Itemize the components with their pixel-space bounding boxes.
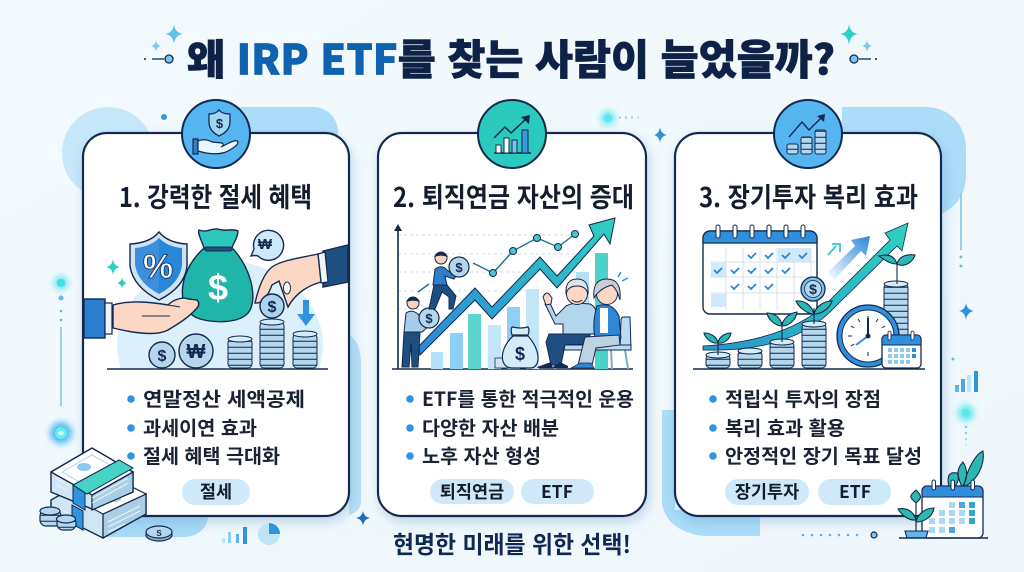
icon: coins with arrow <box>774 100 842 168</box>
illustration: stacks of cash and coins <box>40 448 146 538</box>
icon: hand holding shield <box>182 100 250 168</box>
arrow: growth curve <box>703 223 908 350</box>
icon: pale money bag: $ <box>515 344 525 364</box>
tag: 장기투자: 장기투자 <box>735 479 799 504</box>
illustration: long-term compounding <box>693 223 925 369</box>
mini bar chart and pie <box>222 523 280 545</box>
bullet list 2: 다양한 자산 배분 <box>422 412 559 441</box>
bullet list 3: 안정적인 장기 목표 달성 <box>725 440 922 469</box>
bullet list 1: 연말정산 세액공제 <box>143 383 305 412</box>
title decoration right <box>840 24 877 63</box>
heading 1: 1. 강력한 절세 혜택 <box>119 176 312 215</box>
tag: 절세 <box>182 479 250 505</box>
coins <box>149 334 213 368</box>
coin stacks <box>228 319 317 368</box>
icon: lying coin: S <box>156 529 162 538</box>
icon: shield with percent: % <box>143 248 173 286</box>
coins: ₩ <box>187 341 206 363</box>
senior man <box>537 279 597 368</box>
panel: card 1 <box>83 100 349 516</box>
line with dots <box>418 230 578 292</box>
heading 2: 2. 퇴직연금 자산의 증대 <box>393 176 634 215</box>
arrow: small teal <box>828 244 840 255</box>
icon: won speech bubble: ₩ <box>258 236 273 253</box>
bullet list 3: 적립식 투자의 장점 <box>725 383 881 412</box>
icon: sparkles <box>106 259 127 289</box>
icon: lying coin <box>146 526 172 541</box>
panel: card 2 <box>378 100 646 516</box>
person with coin, upper <box>429 252 469 309</box>
person with coin, lower: $ <box>425 311 433 326</box>
decorative blobs <box>62 107 966 537</box>
coin stacks <box>706 281 908 368</box>
person with coin, upper: $ <box>455 260 463 275</box>
icon: held coin: $ <box>268 299 277 316</box>
illustration: calendar with plants <box>898 451 988 538</box>
bullet list 2: 노후 자산 형성 <box>422 440 541 469</box>
arrow: fading blue <box>828 236 870 280</box>
senior couple on chair <box>537 272 631 369</box>
title decoration left <box>144 24 183 63</box>
bullet list 2: ETF를 통한 적극적인 운용 <box>422 383 634 412</box>
icon: won speech bubble <box>251 230 284 260</box>
title: 왜 IRP ETF를 찾는 사람이 늘었을까? <box>187 26 835 86</box>
icon: hand holding shield: $ <box>216 116 224 131</box>
bullet list 3: 복리 효과 활용 <box>725 412 845 441</box>
icon: receiving hand <box>255 245 348 307</box>
bottom tagline: 현명한 미래를 위한 선택! <box>393 525 631 560</box>
icon: clock <box>837 305 899 367</box>
icon: coin on sprout: $ <box>809 281 817 297</box>
tag: 퇴직연금: 퇴직연금 <box>440 479 504 504</box>
icon: money bag <box>182 229 253 322</box>
bottom dotted line <box>802 532 877 538</box>
bullet list 1: 절세 혜택 극대화 <box>143 440 280 469</box>
arrow: down <box>297 300 315 326</box>
bar chart <box>431 253 608 369</box>
icon: money bag: $ <box>208 267 228 308</box>
coins: $ <box>158 348 167 365</box>
bullet list 1: 과세이연 효과 <box>143 412 257 441</box>
icon: growth chart <box>478 100 546 168</box>
icon: held coin <box>260 294 284 318</box>
senior woman <box>571 272 628 368</box>
illustration: tax savings money bag <box>84 228 348 370</box>
icon: mini calendar <box>882 331 921 368</box>
icon: sprouts <box>704 255 915 355</box>
chart axes <box>392 230 633 369</box>
icon: pale money bag <box>495 327 538 368</box>
bullet list 2 <box>406 383 634 469</box>
bullet list 3 <box>709 383 922 469</box>
icon: coin on sprout <box>801 277 825 301</box>
panel: card 3 <box>675 100 941 516</box>
chair <box>555 317 631 369</box>
tag: ETF: ETF <box>839 479 871 504</box>
top sparkle and dots <box>161 111 667 526</box>
person with coin, lower <box>402 297 439 367</box>
bullet list 1 <box>127 383 305 469</box>
tag: ETF <box>521 479 594 504</box>
heading 3: 3. 장기투자 복리 효과 <box>699 176 918 215</box>
tag: ETF: ETF <box>541 479 573 504</box>
icon: shield with percent <box>130 232 187 300</box>
tag: 절세: 절세 <box>200 479 232 504</box>
tag: ETF <box>818 479 891 505</box>
icon: giving hand <box>84 298 199 338</box>
icon: calendar with checks <box>703 225 817 314</box>
arrow: rising zigzag <box>419 218 615 355</box>
side decoration left <box>50 276 72 444</box>
side decoration right <box>952 193 978 446</box>
illustration: retirement asset growth chart <box>392 218 633 369</box>
